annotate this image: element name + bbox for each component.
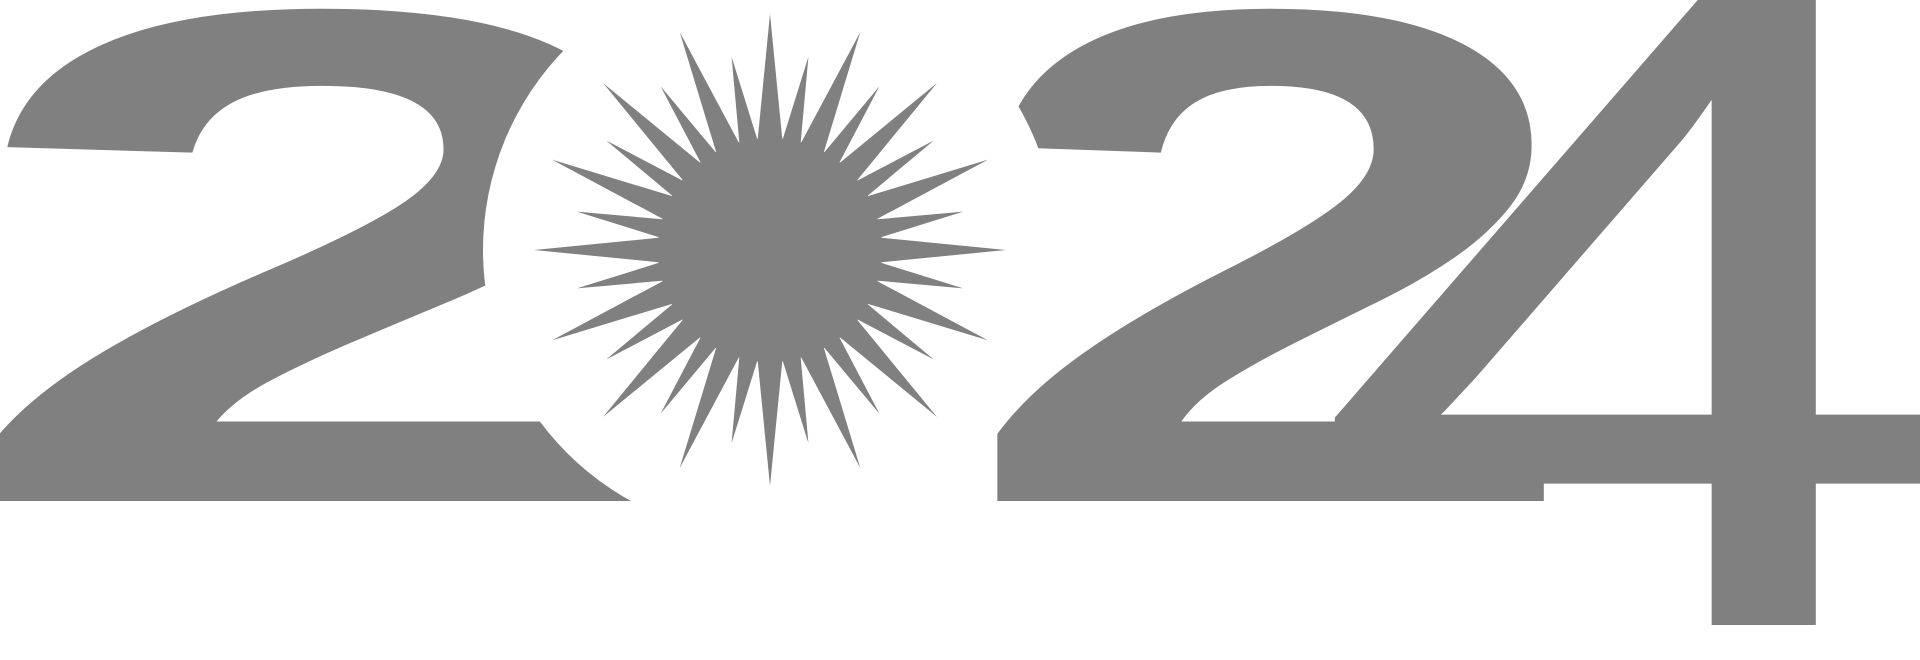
circular cut-out around the star	[483, 0, 1057, 537]
icon: starburst	[534, 14, 1006, 486]
